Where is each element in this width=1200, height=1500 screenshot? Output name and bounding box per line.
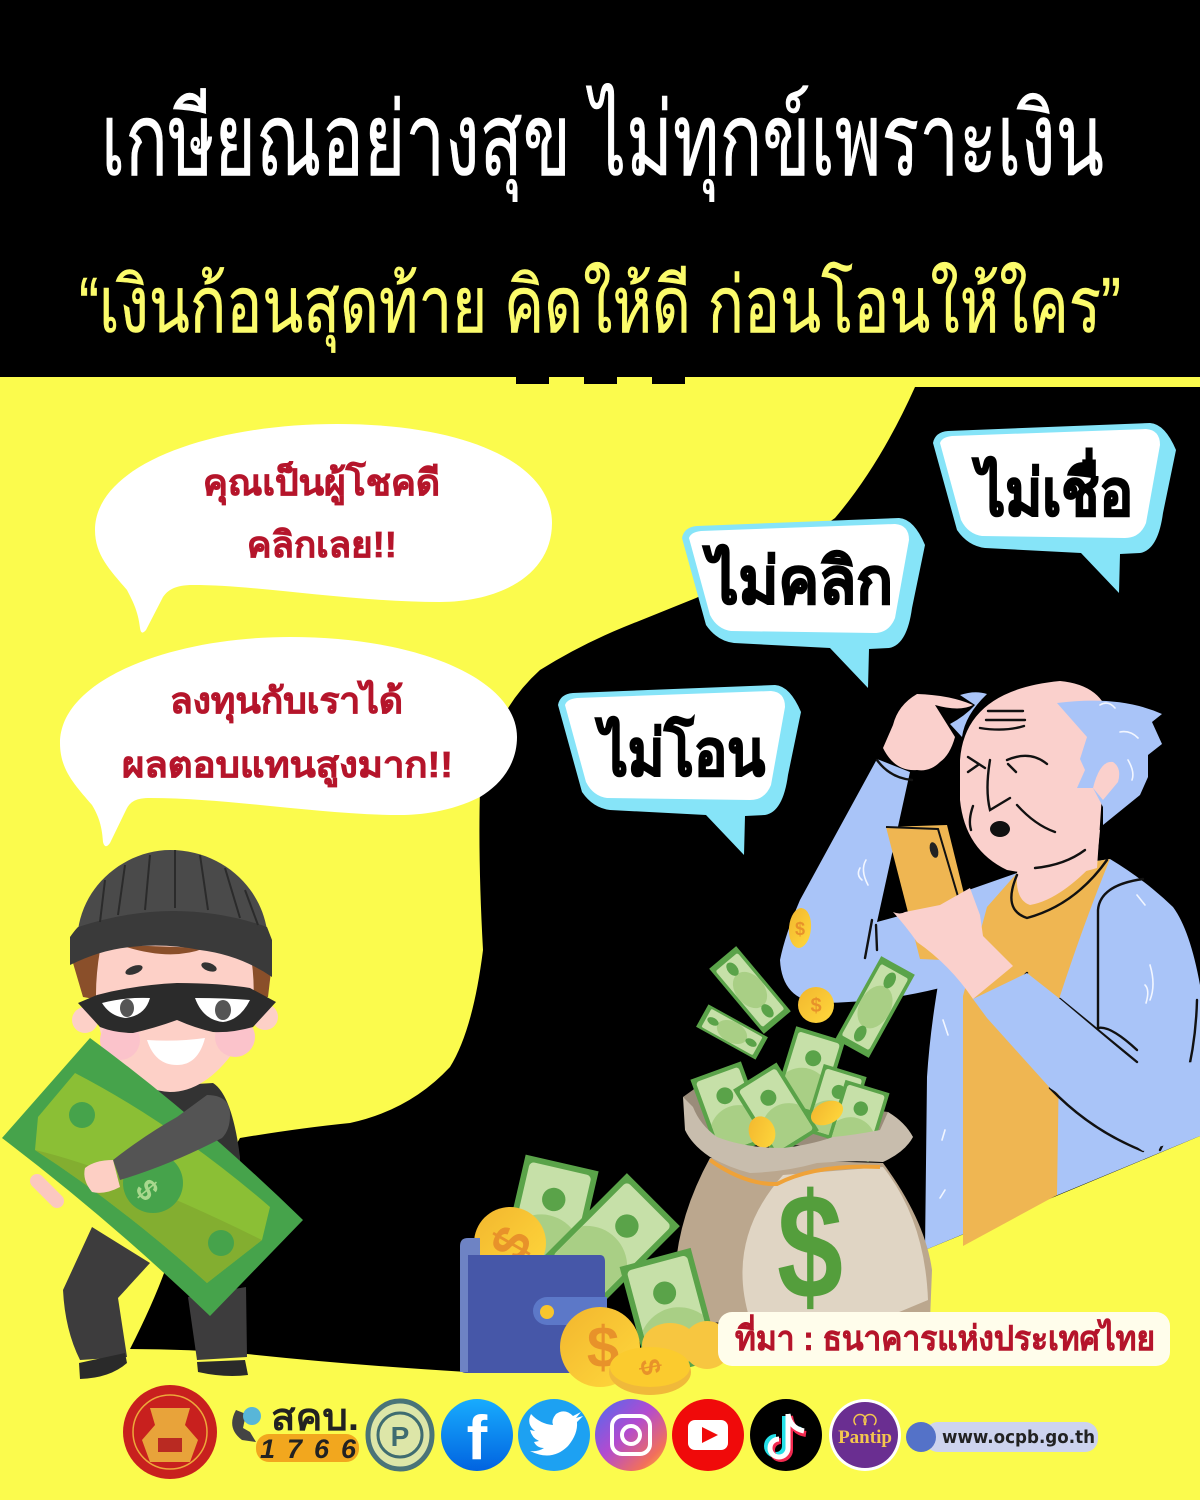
hair [1057,701,1162,825]
speech bubble: do not believe [933,423,1176,593]
flat coin: $ [634,1357,667,1378]
speech bubble: do not believe: ไม่เชื่อ [972,448,1133,529]
smile [147,1038,205,1065]
hotline logo [232,1397,359,1464]
hat dome [78,850,267,930]
coin at elbow: $ [795,919,805,939]
facebook icon [441,1399,513,1473]
website link [906,1422,1098,1452]
source note: ที่มา : ธนาคารแห่งประเทศไทย [735,1314,1155,1358]
source note [718,1312,1170,1366]
man's neck [1017,830,1100,905]
falling bills [696,946,915,1060]
speech bubble: you are the lucky one: คลิกเลย!! [247,524,397,565]
thief arm [113,1095,230,1180]
hair fringe [120,945,205,954]
tiktok icon [750,1399,822,1471]
illustration: thief [2,850,303,1379]
ear [1093,762,1119,800]
man's forearm [973,973,1200,1151]
wallet body [460,1255,605,1373]
youtube icon [672,1399,744,1471]
giant banknote: $ [129,1173,165,1208]
speech bubble: you are the lucky one [95,424,552,633]
hotline logo: 1766 [260,1434,357,1464]
mask [78,983,276,1033]
bag back rim [683,1087,913,1150]
speech bubble: do not transfer: ไม่โอน [595,715,765,789]
twitter icon [518,1399,590,1471]
speech bubble: do not click: ไม่คลิก [702,544,893,617]
wallet clasp [533,1297,607,1325]
bag cord [710,1160,880,1184]
illustration: money bag [674,907,932,1330]
pantip icon: Pantip [838,1427,892,1448]
consumer logo [368,1401,432,1469]
hair [73,950,272,1000]
mouth [990,821,1010,837]
speech bubble: invest with us: ลงทุนกับเราได้ [170,679,403,724]
face lines [865,711,1197,1151]
hat ribs [100,850,258,925]
instagram icon [595,1399,667,1471]
website link: www.ocpb.go.th [942,1427,1095,1448]
eyes [102,998,250,1022]
bills in bag [687,1025,892,1178]
flat coin [609,1347,691,1395]
thief legs [63,1227,150,1360]
speech bubble: do not click [682,518,925,688]
thief shoes [79,1353,127,1379]
falling coin: $ [810,995,822,1017]
left hair tuft [950,692,987,737]
black swoosh shape [130,387,1200,1372]
large coin: $ [587,1315,619,1380]
hat brim [70,911,272,977]
phone [886,825,968,960]
header band [0,0,1200,384]
illustration: wallet with money [460,1154,731,1404]
cheeks [100,1020,140,1060]
hotline logo: สคบ. [271,1397,359,1439]
illustration: elderly man with phone [780,681,1200,1250]
head [960,681,1110,875]
coin in wallet [474,1207,546,1279]
speech bubble: you are the lucky one: คุณเป็นผู้โชคดี [203,460,440,506]
bag front lip [683,1097,913,1173]
facebook icon: f [467,1404,488,1473]
speech bubble: invest with us: ผลตอบแทนสูงมาก!! [122,744,453,788]
man's orange sweater [963,859,1110,1246]
pantip icon [829,1399,901,1471]
falling coin [798,987,834,1023]
lower hand [893,888,1013,999]
thief body [130,1083,240,1200]
raised arm [780,759,940,1003]
raised hand [883,694,973,770]
seal logo [123,1385,217,1479]
footer logos [123,1385,1098,1479]
brow strokes [124,963,144,977]
face [96,942,254,1092]
ears [72,1007,98,1033]
thief hand [84,1160,120,1193]
dollar sign on bag: $ [777,1162,843,1330]
coins in bag [744,1096,847,1151]
clothing wisps [858,703,1153,1198]
giant banknote [2,1038,303,1316]
yellow background [0,377,1200,1500]
speech bubble: invest with us [60,637,517,846]
speech bubble: do not transfer [558,685,801,855]
thief fingers [37,1181,57,1201]
consumer logo: P [391,1421,409,1452]
coin at elbow [787,907,813,949]
man's torso [925,859,1200,1250]
coin in wallet: $ [479,1217,544,1271]
coin stack [642,1321,731,1369]
large coin [560,1307,640,1387]
